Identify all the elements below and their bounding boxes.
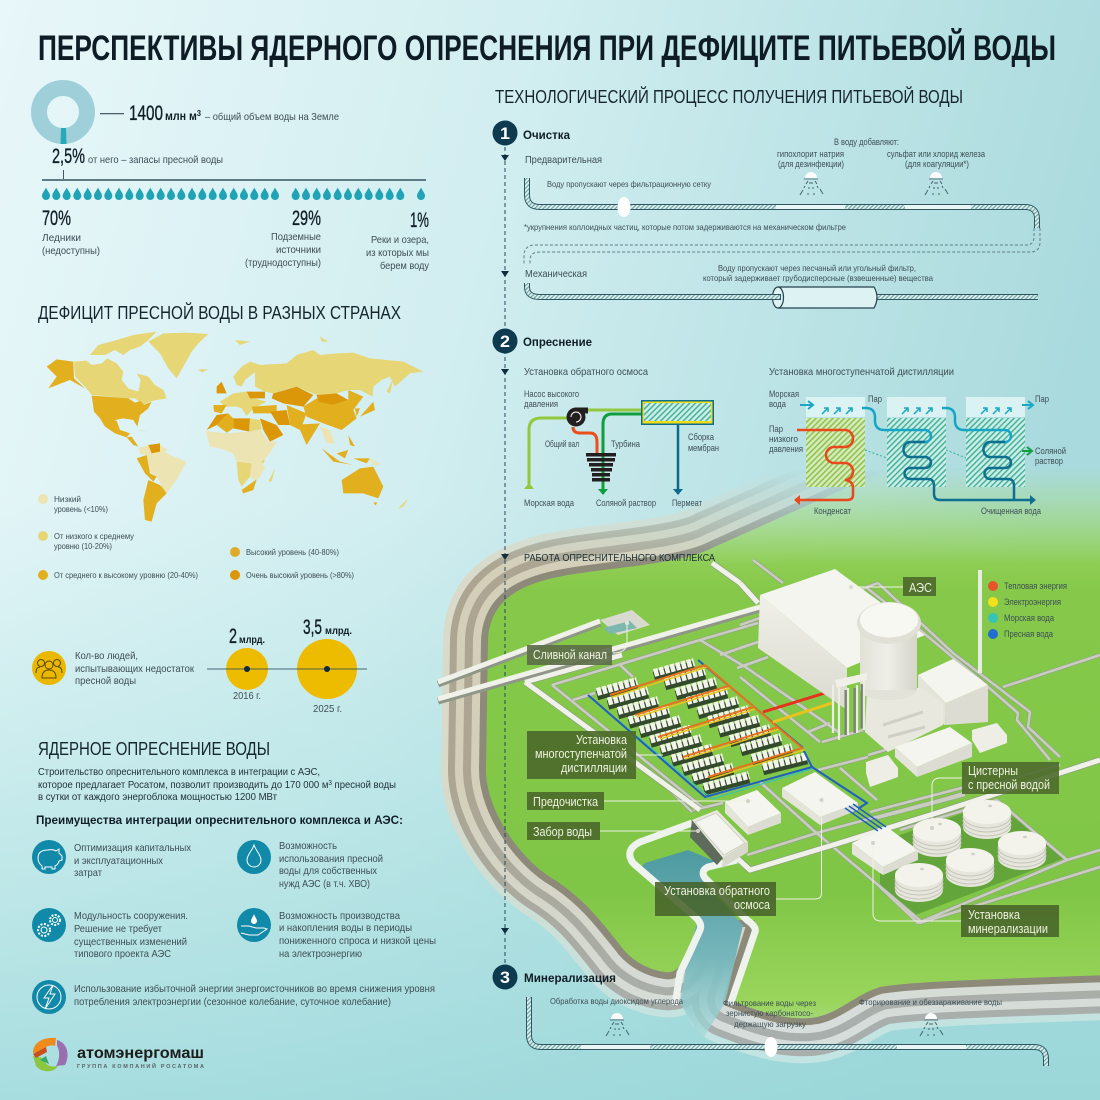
advantage: modularity: Решение не требует [74,923,162,935]
step 3 texts: держащую загрузку [734,1019,807,1029]
auxiliary blocks [866,723,1007,787]
people text: Кол-во людей, [75,650,138,662]
plant legend [988,581,1067,639]
advantage: own needs: воды для собственных [279,865,378,877]
panel: plant [438,569,1067,937]
bubble chart: 2 [229,625,237,648]
advantage: surplus energy [32,980,435,1014]
beach bands [486,400,1100,1018]
label: distillation unit [527,731,636,779]
reverse osmosis building [782,772,858,825]
fresh water pipes [845,804,886,831]
mechanical label: Механическая [525,268,587,280]
map legend [38,494,354,580]
step 2 heading: 2 [500,332,510,351]
distillation diagram: Соляной [1035,446,1066,456]
distillation diagram: Морская [769,389,799,399]
panel: world water [39,88,430,272]
bubble chart: 3,5 [303,616,322,639]
label: fresh water tanks: Цистерны [968,764,1018,778]
vapor arrows [822,408,1011,414]
distillation diagram: раствор [1035,456,1063,466]
legend: low: Низкий [54,494,81,504]
pipe 1 [527,178,1037,228]
heading: freshwater deficit: ДЕФИЦИТ ПРЕСНОЙ ВОДЫ В РАЗНЫХ СТРАНАХ [38,302,401,323]
underground sources: 29% [292,207,321,230]
panel: step 2 desalination [492,328,1066,516]
label: distillation unit: многоступенчатой [535,747,627,761]
total water volume: – общий объем воды на Земле [205,111,339,123]
legend: very high: Очень высокий уровень (>80%) [246,570,354,580]
bubble chart [207,616,367,715]
heading: technological process: ТЕХНОЛОГИЧЕСКИЙ ПРОЦЕСС ПОЛУЧЕНИЯ ПИТЬЕВОЙ ВОДЫ [495,86,963,107]
rivers and lakes: Реки и озера, [371,234,429,246]
rivers and lakes: 1% [410,209,429,232]
discharge channel [438,607,760,701]
reverse osmosis diagram: Общий вал [545,439,579,449]
reverse osmosis diagram: Насос высокого [524,389,579,399]
total water volume [100,102,339,125]
distillation diagram: низкого [769,434,798,444]
advantage: storage [237,908,436,960]
tanks [895,800,1046,902]
legend: low [38,494,108,514]
distillation diagram: давления [769,444,803,454]
footnote: *укрупнения коллоидных частиц, которые потом задерживаются на механическом фильтре [524,222,846,232]
reactor [857,602,943,752]
icon: hand with drop [237,908,271,942]
advantage: storage: пониженного спроса и низкой цены [279,935,436,947]
bubble chart: 2016 г. [233,690,261,702]
step 3 heading: Минерализация [524,971,616,985]
icon: sprayers [800,172,948,195]
reverse osmosis diagram: Сборка [688,432,714,442]
label: fresh water tanks: с пресной водой [968,778,1050,792]
step 3 texts [550,996,1002,1029]
nuclear desalination paragraph [38,766,396,803]
brine arrow [1022,447,1032,455]
label: NPP [903,577,936,596]
membrane [641,400,714,425]
rivers and lakes: из которых мы [366,247,429,259]
plant legend: Морская вода [1004,613,1054,623]
dark coils [904,442,1030,500]
icon: people [32,651,66,685]
advantages heading: Преимущества интеграции опреснительного комплекса и АЭС: [36,813,403,827]
icon: gears [32,908,66,942]
right block [918,659,988,725]
bubble chart: 2025 г. [313,703,342,715]
total water volume: млн м [165,111,199,123]
glaciers: 70% [42,207,71,230]
panel: coastline and green land [486,400,1100,1018]
nuclear desalination paragraph: которое предлагает Росатом, позволит производить до 170 000 м [38,779,358,791]
advantage: modularity [32,908,188,960]
total water volume: 1400 [129,102,163,125]
people text [75,650,194,687]
advantage: surplus energy: потребления электроэнергии (сезонное колебание, суточное колебание) [74,996,391,1008]
underground sources: Подземные [271,231,321,243]
heading: nuclear desalination: ЯДЕРНОЕ ОПРЕСНЕНИЕ ВОДЫ [38,739,270,759]
advantage: modularity: типового проекта АЭС [74,948,171,960]
pipe frame [833,673,867,740]
step 3 texts: зернистую карбонатосо- [726,1008,813,1018]
reverse osmosis diagram: Соляной раствор [596,498,656,508]
advantage: modularity: Модульность сооружения. [74,910,188,922]
advantage: surplus energy: Использование избыточной энергии энергоисточников во время снижения уровня [74,983,435,995]
water intake [690,810,748,868]
logo [33,1038,204,1071]
bubble chart: млрд. [239,634,265,646]
nuclear desalination paragraph: 3 [328,780,332,787]
step 3 heading: 3 [500,968,510,987]
distillation diagram: Пар [1035,394,1049,404]
distillation diagram: вода [769,399,786,409]
fresh water share: от него – запасы пресной воды [88,154,223,166]
advantage: costs: и эксплуатационных [74,855,164,867]
label: pretreatment: Предочистка [533,795,598,809]
icon: piggy bank [32,840,66,874]
fresh water share: 2,5% [52,145,85,168]
step 2 heading [492,328,592,354]
filter mesh text: Воду пропускают через фильтрационную сетку [547,179,712,189]
legend: medium to high: От среднего к высокому уровню (20-40%) [54,570,198,580]
label: reverse osmosis: осмоса [734,898,770,912]
preliminary label: Предварительная [525,154,602,166]
legend: low: уровень (<10%) [54,504,108,514]
turbine [586,453,616,482]
step 3 texts: Фильтрование воды через [723,998,816,1008]
sand filter text: Воду пропускают через песчаный или угольный фильтр, [718,263,916,273]
reverse osmosis title: Установка обратного осмоса [524,366,648,378]
logo: атомэнергомаш [77,1045,204,1062]
reagents text: гипохлорит натрия [777,149,844,159]
distillation title: Установка многоступенчатой дистилляции [769,366,954,378]
people text: испытывающих недостаток [75,663,194,675]
pump [566,408,588,426]
rivers and lakes [366,209,430,272]
label: fresh water tanks [962,762,1059,794]
underground sources: (труднодоступны) [245,257,321,269]
advantage: costs: Оптимизация капитальных [74,842,192,854]
panel: advantages [32,840,436,1014]
reverse osmosis diagram: Пермеат [672,498,702,508]
step 2 heading: Опреснение [523,335,592,349]
reverse osmosis diagram: мембран [688,443,719,453]
dashed connection [524,228,1040,264]
pipe 3 [529,997,1046,1066]
step 3 texts: Обработка воды диоксидом углерода [550,996,683,1006]
sand filter text [703,263,933,283]
reagents text: (для коагуляции*) [905,159,969,169]
reagents text [777,137,985,169]
logo: ГРУППА КОМПАНИЙ РОСАТОМА [77,1062,204,1070]
cyan coils [862,408,1011,442]
step 3 texts: Фторирование и обеззараживание воды [859,997,1002,1007]
advantage: costs: затрат [74,867,102,879]
reverse osmosis diagram: Морская вода [524,498,574,508]
bubble chart: млрд. [325,625,352,637]
sea water arrow [800,401,1033,409]
advantage: modularity: существенных изменений [74,936,187,948]
mineralization building [852,827,918,875]
fresh water share [42,145,426,181]
label: mineralization: минерализации [968,922,1048,936]
world map [47,332,423,522]
reverse osmosis diagram [524,389,719,508]
label: distillation unit: Установка [576,733,627,747]
plant legend: Пресная вода [1004,629,1053,639]
icon: sprayers [606,1013,943,1036]
legend: high: Высокий уровень (40-80%) [246,547,339,557]
reverse osmosis diagram: Турбина [611,439,640,449]
label: discharge canal [527,645,612,665]
complex heading: РАБОТА ОПРЕСНИТЕЛЬНОГО КОМПЛЕКСА [524,553,715,564]
pretreatment building [725,790,781,835]
glaciers: Ледники [42,232,81,244]
label: reverse osmosis [655,882,776,916]
nuclear desalination paragraph: пресной воды [332,779,396,791]
label: reverse osmosis: Установка обратного [664,884,770,898]
label: discharge canal: Сливной канал [533,648,607,662]
plant legend: Электроэнергия [1004,597,1061,607]
advantage: storage: и накопления воды в периоды [279,922,412,934]
chimney [978,570,982,673]
panel: step 3 mineralization [492,964,1046,1066]
legend: low to medium [38,531,135,551]
logo mark [33,1038,68,1071]
step 1 heading [492,120,570,146]
intake channel [630,823,755,1040]
distillation diagram: Конденсат [814,506,851,516]
pipe 2 with filter [527,283,1038,308]
heating coil [797,430,853,500]
step 3 heading [492,964,616,990]
rivers and lakes: берем воду [380,260,430,272]
nuclear desalination paragraph: в сутки от каждого энергоблока мощностью 1200 МВт [38,791,277,803]
green land [486,475,1100,1018]
leader lines [600,585,962,921]
donut chart [39,88,87,144]
sand filter text: который задерживает грубодисперсные (взвешенные) вещества [703,273,933,283]
drops scale [42,188,425,200]
reagents text: (для дезинфекции) [778,159,844,169]
label: pretreatment [527,792,604,810]
people text: пресной воды [75,675,136,687]
step 1 heading: 1 [500,124,510,143]
underground sources [245,207,321,269]
glaciers [42,207,100,257]
legend: low to medium: От низкого к среднему [54,531,135,541]
label: mineralization [961,905,1059,937]
glaciers: (недоступны) [42,245,100,257]
label: distillation unit: дистилляции [561,761,627,775]
turbine building [758,569,925,710]
underground sources: источники [276,244,321,256]
icon: drop [237,840,271,874]
advantage: own needs: нужд АЭС (в т.ч. ХВО) [279,878,370,890]
icon: lightning [32,980,66,1014]
step 1 heading: Очистка [523,128,570,142]
advantage: costs [32,840,192,879]
distillation diagram [769,389,1066,516]
process timeline [501,140,509,965]
label: mineralization: Установка [968,908,1020,922]
distillation diagram: Очищенная вода [981,506,1041,516]
distillation array [588,660,867,812]
advantage: own needs: Возможность [279,840,337,852]
legend: low to medium: уровню (10-20%) [54,541,112,551]
label: water intake: Забор воды [533,825,592,839]
roads [525,560,1100,923]
advantage: storage: на электроэнергию [279,948,362,960]
total water volume: 3 [197,109,202,118]
reagents text: В воду добавляют: [834,137,899,147]
label: NPP: АЭС [909,581,932,595]
panel: step 1 purification [492,120,1040,308]
distillation diagram: Пар [769,424,783,434]
reverse osmosis diagram: давления [524,399,558,409]
plant legend: Тепловая энергия [1004,581,1067,591]
tank yard ground [880,813,1062,914]
advantage: own needs [237,840,383,890]
reagents text: сульфат или хлорид железа [887,149,985,159]
advantage: storage: Возможность производства [279,910,400,922]
advantage: own needs: использования пресной [279,853,383,865]
panel: people lacking water [32,616,367,715]
nuclear desalination paragraph: Строительство опреснительного комплекса в интеграции с АЭС, [38,766,320,778]
distillation diagram: Пар [868,394,882,404]
